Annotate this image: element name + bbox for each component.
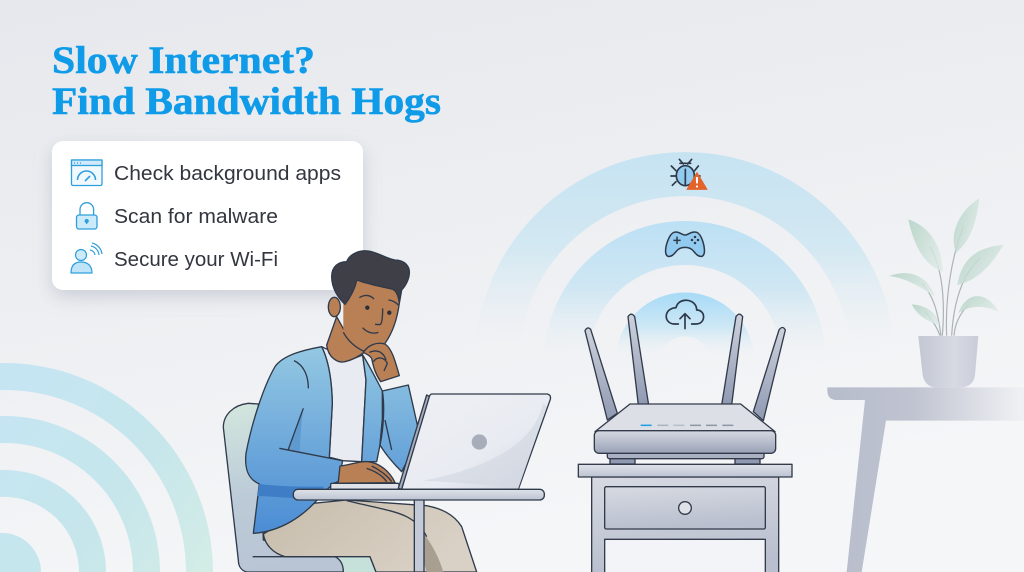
text: scan for malware: Scan for malware: [114, 206, 278, 228]
title: Slow Internet?: [52, 39, 315, 82]
neck: [327, 317, 367, 362]
icon: cloud upload: [666, 300, 704, 329]
finger lines: [369, 351, 387, 371]
plant pot: [918, 336, 978, 387]
sleeve fold: [380, 420, 392, 450]
laptop logo: [472, 434, 487, 450]
hand on chin: [363, 343, 399, 382]
router on bedside table: [578, 159, 792, 572]
typing hand: [333, 462, 395, 483]
panel: checklist card: [52, 141, 363, 290]
hands, laptop and desk: [293, 394, 551, 572]
facial features: [359, 296, 398, 333]
icon: warning triangle: [687, 173, 707, 189]
lower opening: [605, 539, 765, 572]
laptop: [398, 394, 551, 489]
face edge: [343, 303, 399, 352]
title: Find Bandwidth Hogs: [52, 80, 441, 123]
chair: [223, 403, 377, 572]
icon: game controller: [666, 232, 704, 256]
table top: [293, 489, 544, 500]
icon: padlock: [76, 203, 97, 229]
ear: [328, 297, 340, 317]
router status lights: [641, 423, 733, 428]
icon: bug: [671, 159, 700, 186]
person at desk: [223, 251, 551, 572]
plant leaves: [889, 198, 1003, 336]
face: [343, 278, 399, 351]
title: [52, 39, 441, 123]
drawer: [605, 487, 765, 529]
controller buttons: [673, 236, 698, 244]
wifi arcs above router: [497, 174, 873, 362]
icon: person with wifi: [71, 243, 102, 273]
bedside table: [578, 464, 792, 572]
icon: browser speedometer: [72, 160, 102, 186]
jacket right panel: [362, 355, 382, 462]
jacket fold details: [288, 408, 303, 452]
jacket lines: [279, 361, 343, 461]
knuckle lines: [367, 466, 392, 482]
router body: [594, 404, 776, 464]
drawer knob: [679, 502, 691, 514]
text: check background apps: Check background apps: [114, 163, 341, 185]
body and clothing: [223, 347, 477, 572]
white shirt: [322, 347, 366, 462]
router antennas: [585, 314, 785, 421]
trousers: [263, 500, 477, 572]
inner leg shadow: [417, 533, 443, 572]
head: [327, 251, 409, 382]
wifi rings: bottom left: [0, 363, 213, 572]
keyboard base: [331, 483, 399, 489]
table leg: [414, 500, 424, 572]
jacket left: [246, 347, 343, 533]
leg fold: [347, 501, 427, 537]
shelf and leg: [827, 387, 1024, 572]
hair: [332, 251, 409, 304]
side shelf with plant: [827, 198, 1024, 572]
text: secure your wi-fi: Secure your Wi-Fi: [114, 249, 278, 271]
sleeve: [380, 385, 420, 472]
jacket hem shadow: [257, 484, 324, 499]
